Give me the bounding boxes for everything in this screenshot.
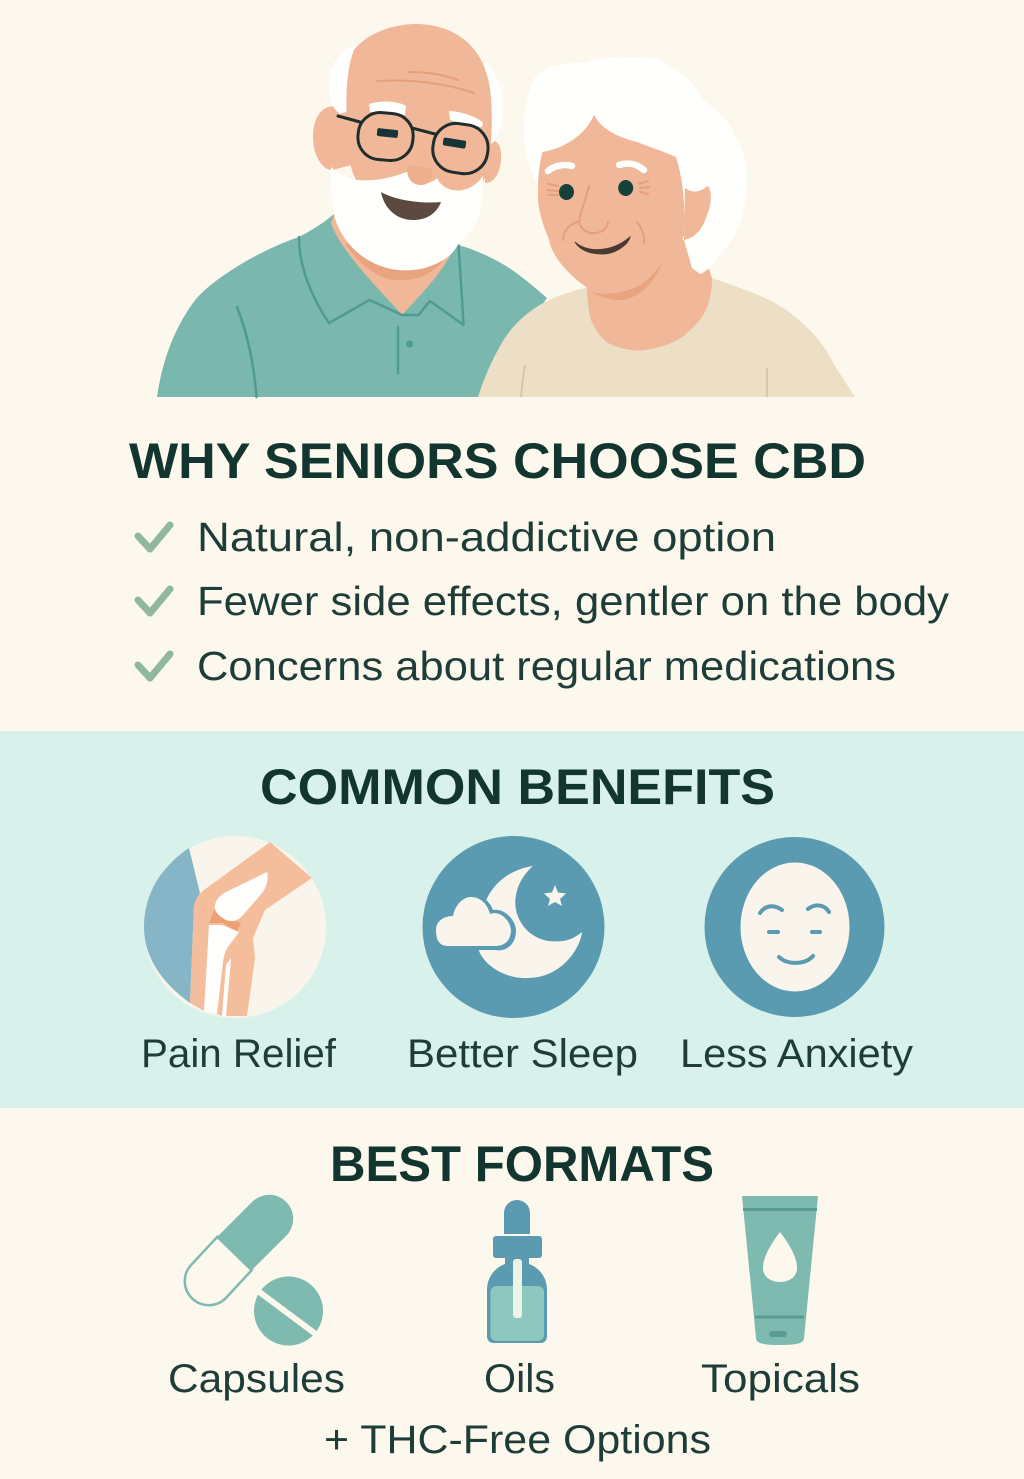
check icon bbox=[138, 525, 170, 549]
moon bbox=[477, 866, 582, 978]
icon: cream tube bbox=[742, 1196, 818, 1345]
droplet bbox=[763, 1232, 797, 1282]
cloud bbox=[433, 894, 516, 950]
dropper bulb bbox=[504, 1200, 530, 1234]
pipette bbox=[513, 1259, 522, 1318]
reasons checklist bbox=[138, 514, 950, 689]
face features bbox=[760, 905, 829, 963]
label: capsules: Capsules bbox=[168, 1357, 345, 1401]
heading: best formats: BEST FORMATS bbox=[330, 1136, 714, 1192]
tube bands bbox=[743, 1210, 817, 1317]
footnote: THC-free options: + THC-Free Options bbox=[324, 1418, 711, 1462]
label: better sleep: Better Sleep bbox=[407, 1032, 638, 1076]
man beard bbox=[331, 167, 483, 270]
reason text: Natural, non-addictive option bbox=[197, 514, 776, 560]
leg bbox=[190, 842, 312, 1016]
star bbox=[544, 885, 566, 906]
man eyes bbox=[377, 128, 466, 149]
woman neck bbox=[586, 240, 712, 351]
woman nose and wrinkles bbox=[547, 181, 649, 243]
icon: knee joint bbox=[144, 836, 326, 1018]
check icon bbox=[138, 654, 170, 678]
man head bbox=[346, 24, 492, 210]
dropper collar bbox=[493, 1236, 542, 1258]
man hair sides bbox=[329, 45, 356, 114]
panel: common benefits bbox=[0, 731, 1024, 1108]
icon: dropper bottle bbox=[487, 1200, 547, 1343]
glasses bbox=[338, 111, 491, 177]
reason text: Concerns about regular medications bbox=[197, 643, 896, 689]
icon: moon, cloud and star bbox=[422, 836, 604, 1018]
label: pain relief: Pain Relief bbox=[141, 1032, 337, 1076]
neck shadow bbox=[345, 243, 445, 280]
man nose bbox=[407, 165, 433, 185]
woman smile bbox=[575, 237, 630, 254]
woman face bbox=[538, 115, 685, 294]
reason text: Fewer side effects, gentler on the body bbox=[197, 578, 950, 624]
fibula bbox=[222, 958, 231, 1016]
format: topicals bbox=[701, 1196, 860, 1401]
man neck bbox=[331, 200, 455, 315]
panel background bbox=[0, 731, 1024, 1108]
man ears bbox=[313, 106, 352, 170]
woman eyebrows bbox=[548, 164, 644, 171]
woman hair bbox=[524, 57, 747, 274]
woman ear bbox=[684, 186, 711, 240]
label: less anxiety: Less Anxiety bbox=[680, 1032, 913, 1076]
icon: capsule bbox=[185, 1195, 293, 1305]
heading: why seniors choose CBD: WHY SENIORS CHOOSE CBD bbox=[129, 433, 866, 489]
man bbox=[157, 24, 547, 397]
sweater seams bbox=[521, 365, 767, 397]
man eyebrows bbox=[369, 102, 483, 127]
forehead wrinkles bbox=[377, 72, 474, 93]
joint cartilage bbox=[209, 905, 241, 932]
oil bbox=[490, 1286, 544, 1341]
chin shadow bbox=[591, 262, 662, 300]
reason 1 bbox=[138, 514, 776, 560]
man mouth bbox=[381, 192, 441, 220]
format: capsules bbox=[168, 1195, 345, 1401]
cap slot bbox=[769, 1331, 787, 1337]
femur bbox=[215, 872, 268, 921]
reason 3 bbox=[138, 643, 896, 689]
man shirt bbox=[157, 214, 547, 397]
bottle bbox=[487, 1258, 547, 1343]
check icon bbox=[138, 589, 170, 613]
reason 2 bbox=[138, 578, 950, 624]
blue leg backdrop bbox=[144, 848, 200, 1003]
icon: tablet bbox=[254, 1276, 323, 1346]
woman eyes bbox=[559, 180, 633, 200]
woman sweater bbox=[478, 278, 855, 397]
heading: common benefits: COMMON BENEFITS bbox=[260, 759, 775, 815]
woman bbox=[478, 57, 855, 397]
illustration: senior couple bbox=[157, 24, 855, 397]
face shape bbox=[740, 862, 850, 992]
label: oils: Oils bbox=[484, 1357, 555, 1401]
label: topicals: Topicals bbox=[701, 1357, 860, 1401]
shirt collar lines bbox=[237, 237, 464, 397]
shirt button bbox=[406, 340, 413, 348]
tibia bbox=[204, 925, 239, 1014]
icon: calm face bbox=[704, 837, 884, 1017]
format: oils bbox=[484, 1200, 555, 1401]
